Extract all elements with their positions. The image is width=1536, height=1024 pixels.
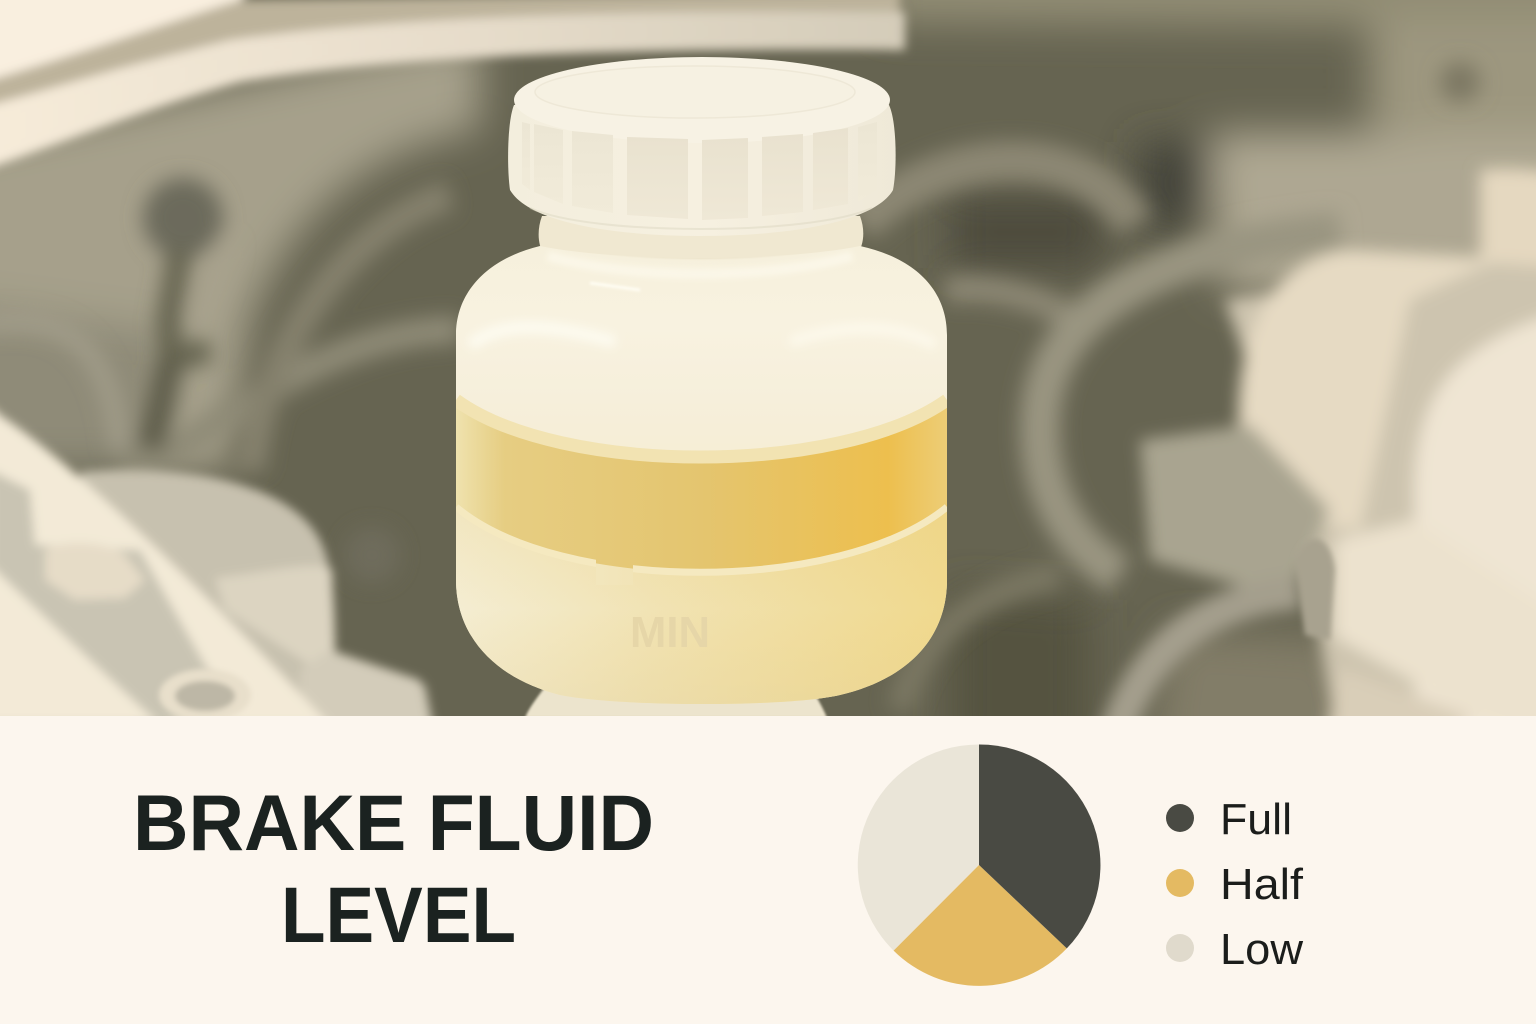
cap top xyxy=(514,57,890,143)
left reservoir cap xyxy=(80,470,440,760)
right engine covers xyxy=(1218,258,1536,704)
minimum line gap xyxy=(596,560,633,572)
cap inner circle xyxy=(535,66,855,118)
cap skirt xyxy=(508,105,896,236)
slice: half xyxy=(894,865,1067,986)
clip on hose xyxy=(1295,539,1335,640)
neck collars xyxy=(636,256,764,259)
shoulder highlights xyxy=(470,327,615,345)
bottle cap xyxy=(508,57,896,236)
title: LEVEL xyxy=(281,870,516,959)
bottle: brake fluid reservoir xyxy=(450,216,950,710)
fluid band xyxy=(456,400,947,572)
photo: blurred engine bay background xyxy=(0,0,1536,760)
lower translucent area xyxy=(456,507,947,710)
slice: full xyxy=(979,744,1100,948)
bottom panel xyxy=(0,716,1536,1024)
cap ribs xyxy=(522,122,877,220)
legend item: half: Half xyxy=(1220,860,1304,909)
bottle stem xyxy=(525,682,827,718)
hood edge xyxy=(0,0,251,86)
minimum line xyxy=(456,507,947,572)
legend item: full: Full xyxy=(1220,795,1292,844)
legend item: low xyxy=(1166,925,1303,974)
slice: low xyxy=(858,744,979,951)
reservoir body xyxy=(450,238,950,710)
cap underside shadow xyxy=(530,208,872,229)
title: BRAKE FLUID xyxy=(133,778,654,867)
pie chart xyxy=(858,744,1100,986)
title xyxy=(133,778,654,959)
legend item: full xyxy=(1166,795,1292,844)
MIN label: MIN xyxy=(630,608,710,657)
legend xyxy=(1166,795,1304,974)
legend item: half xyxy=(1166,860,1304,909)
bolts and bracket xyxy=(143,178,223,258)
hoses xyxy=(120,330,460,470)
legend item: low: Low xyxy=(1220,925,1303,974)
reservoir neck xyxy=(539,216,863,260)
mid-tone walls xyxy=(0,30,480,470)
fluid surface foam xyxy=(456,400,947,457)
left cream housing xyxy=(0,406,325,716)
